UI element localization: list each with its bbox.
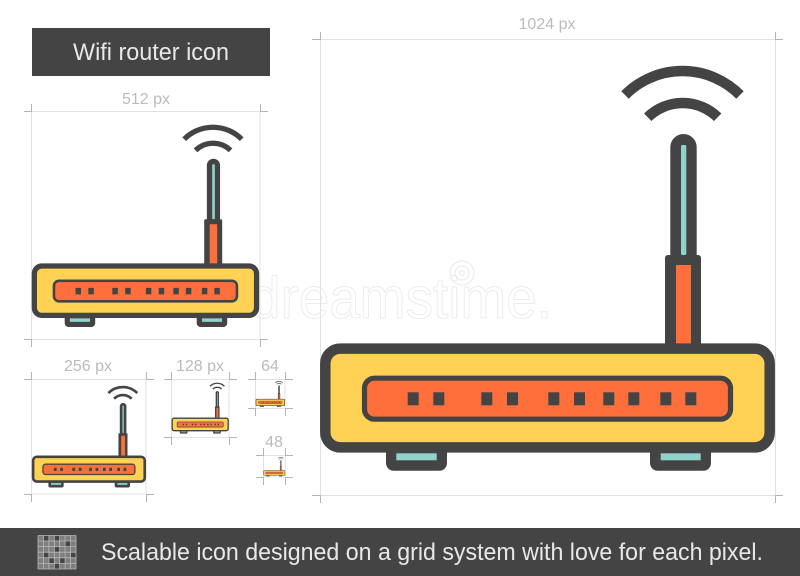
router icon: 64 px [256,381,285,407]
frame: 512 px [24,104,268,347]
frame: 48 px [256,448,293,485]
frame: 256 px [24,372,154,502]
router icon: 512 px [34,127,257,327]
label: 256 px: 256 px [64,358,112,375]
icon: pixel grid [38,536,76,569]
router icon: 256 px [33,387,145,487]
router icon: 1024 px [325,71,770,471]
antenna [665,134,701,350]
watermark: dreamstime. [250,266,552,331]
label: 64: 64 [261,358,279,375]
router body [325,349,770,447]
title banner [32,28,270,76]
frame: 64 px [248,372,293,416]
footer bar [0,528,800,576]
frame: 1024 px [312,32,783,503]
router icon: 48 px [264,457,285,476]
router icon: 128 px [172,383,228,434]
label: 48: 48 [265,434,283,451]
feet [386,445,711,471]
indicator panel [364,378,730,419]
label: 512 px: 512 px [122,91,170,108]
label: 128 px: 128 px [176,358,224,375]
title banner: Wifi router icon [73,39,229,66]
indicator lights [408,392,696,405]
footer text: Scalable icon designed on a grid system with love for each pixel. [101,539,763,566]
label: 1024 px: 1024 px [519,16,575,33]
wifi signal arcs [625,71,740,117]
frame: 128 px [164,372,237,445]
